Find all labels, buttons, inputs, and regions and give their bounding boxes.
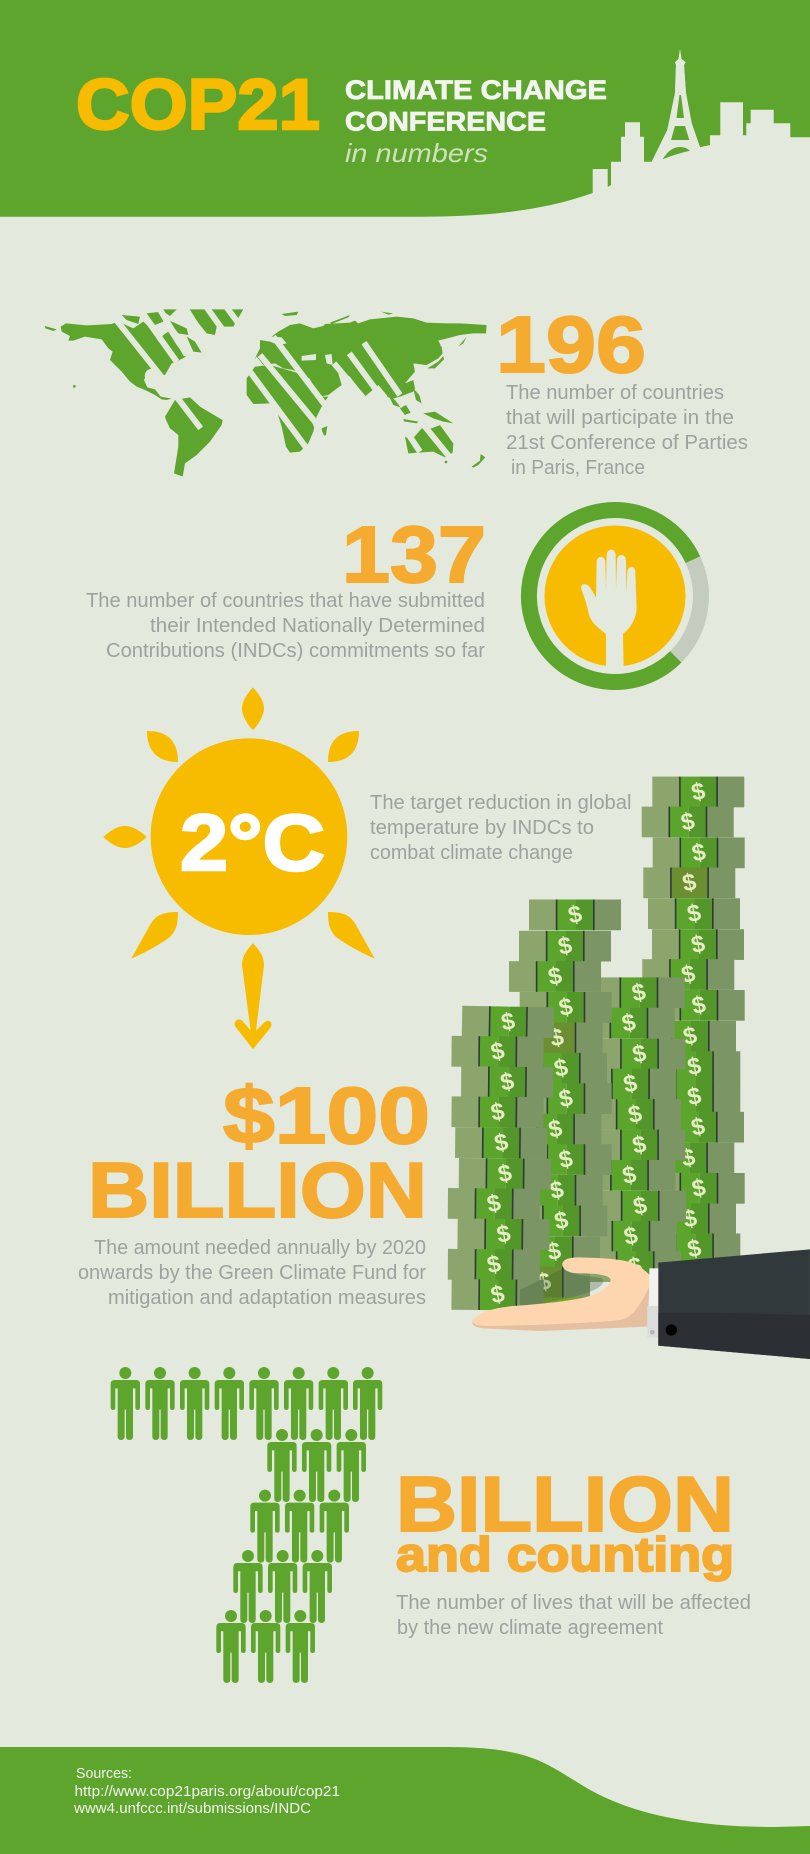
money stack: third column: $ <box>621 1222 641 1251</box>
title: COP21: COP21 <box>76 66 320 145</box>
money stack: right column: $ <box>678 807 698 837</box>
icon: hand and suit sleeve <box>472 1249 810 1359</box>
money stack: right column: $ <box>681 1022 700 1051</box>
stat: 196: 196 <box>496 300 646 389</box>
text: 196 description: that will participate in the <box>506 407 734 429</box>
money stack: right column: $ <box>680 868 699 898</box>
stat: $100 billion <box>88 1071 430 1234</box>
stat: $100 billion: $100 <box>223 1071 430 1160</box>
text: sources: www4.unfccc.int/submissions/INDC <box>73 1800 311 1817</box>
money stack: left column: $ <box>488 1098 508 1127</box>
text: temperature target description <box>370 792 632 864</box>
money stack: left column: $ <box>492 1128 511 1158</box>
money stack: third column: $ <box>626 1252 645 1281</box>
money stack: second column: $ <box>566 900 585 930</box>
money stack: second column: $ <box>547 1176 567 1205</box>
money stack: left column: $ <box>498 1068 517 1097</box>
money stack: third column: $ <box>630 1039 649 1069</box>
money stack: right column: $ <box>679 960 698 989</box>
icon: sun with 2 degrees C <box>103 687 375 959</box>
money stack: second column: $ <box>552 1054 571 1083</box>
subtitle: CLIMATE CHANGE <box>345 75 607 105</box>
world map with diagonal stripes <box>45 307 487 477</box>
money stack: right column <box>642 777 745 1264</box>
money stack: second column: $ <box>545 1237 564 1266</box>
text: sources: http://www.cop21paris.org/about/cop21 <box>74 1783 340 1800</box>
text: 196 description: 21st Conference of Parties <box>506 432 748 454</box>
text: lives affected description <box>396 1592 751 1639</box>
money stack: right column: $ <box>685 1082 704 1111</box>
money stack: left column: $ <box>485 1189 504 1218</box>
subtitle: CONFERENCE <box>345 106 546 136</box>
text: temperature target description: combat climate change <box>370 842 573 864</box>
money stack: third column: $ <box>626 1100 645 1129</box>
money stack: right column: $ <box>689 991 709 1020</box>
stat: billion and counting: BILLION <box>396 1460 734 1548</box>
money stack: second column: $ <box>546 1115 565 1144</box>
text: $100 billion description <box>78 1237 426 1309</box>
money stack: third column <box>583 977 686 1282</box>
money stack: second column: $ <box>556 1145 576 1174</box>
money stack: left column: $ <box>485 1250 504 1279</box>
money stack: second column: $ <box>535 1267 554 1297</box>
money stack: right column: $ <box>681 1204 700 1234</box>
money stack: left column: $ <box>488 1037 508 1066</box>
money stack: right column: $ <box>685 1052 704 1081</box>
text: $100 billion description: mitigation and adaptation measures <box>108 1287 426 1309</box>
money stack: second column: $ <box>547 1023 567 1053</box>
icon: Eiffel Tower <box>652 49 700 162</box>
money stack: second column <box>498 900 621 1306</box>
money stack: left column: $ <box>488 1280 508 1309</box>
money stack: right column: $ <box>685 1234 704 1264</box>
text: lives affected description: The number of lives that will be affected <box>396 1592 751 1614</box>
subtitle <box>345 75 607 168</box>
text: temperature target description: temperature by INDCs to <box>370 817 594 839</box>
header banner with Paris skyline <box>0 0 810 217</box>
money stack: second column: $ <box>556 1084 576 1113</box>
money stack: right column: $ <box>679 1143 698 1173</box>
money stack: left column: $ <box>496 1159 515 1188</box>
money stack: right column: $ <box>689 838 709 868</box>
money stack: left column: $ <box>494 1220 514 1249</box>
icon: sun with 2 degrees C: 2°C <box>180 798 325 887</box>
money stack: second column: $ <box>546 962 565 991</box>
text: lives affected description: by the new climate agreement <box>397 1617 663 1639</box>
text: sources <box>73 1765 340 1817</box>
stat: $100 billion: BILLION <box>88 1146 427 1234</box>
text: temperature target description: The target reduction in global <box>370 792 632 814</box>
money stack: third column: $ <box>620 1161 639 1190</box>
text: 137 description <box>86 590 485 662</box>
money stack: right column: $ <box>689 777 708 807</box>
money stack: right column: $ <box>689 1113 708 1142</box>
money stack: right column: $ <box>689 930 708 959</box>
stat: billion and counting <box>396 1460 734 1582</box>
icon: raised hand in progress ring <box>529 510 701 682</box>
text: 137 description: Contributions (INDCs) commitments so far <box>106 640 485 662</box>
text: 196 description: in Paris, France <box>511 457 645 479</box>
money stack: third column: $ <box>619 1009 639 1038</box>
money stack: right column: $ <box>685 899 704 928</box>
money stack: third column: $ <box>629 978 649 1007</box>
pictogram: people forming number 7 <box>111 1367 382 1683</box>
money stack: left column: $ <box>499 1007 518 1037</box>
arrow: sun to $100 billion <box>235 943 272 1049</box>
footer band <box>0 1747 810 1854</box>
text: 196 description <box>506 382 748 479</box>
text: sources: Sources: <box>76 1765 132 1782</box>
money stack: second column: $ <box>556 932 575 961</box>
text: 196 description: The number of countries <box>506 382 724 404</box>
text: 137 description: The number of countries that have submitted <box>86 590 485 612</box>
subtitle: in numbers <box>345 138 488 168</box>
money stack: third column: $ <box>630 1130 649 1160</box>
money stack: third column: $ <box>631 1192 650 1221</box>
illustration: stacks of money on hand <box>448 777 810 1359</box>
money stack: right column: $ <box>689 1174 709 1203</box>
text: $100 billion description: The amount needed annually by 2020 <box>94 1237 426 1259</box>
stat: 137: 137 <box>342 510 486 599</box>
money stack: left column <box>448 1006 554 1311</box>
stat: billion and counting: and counting <box>396 1529 734 1582</box>
money stack: second column: $ <box>556 993 576 1022</box>
money stack: second column: $ <box>552 1206 571 1236</box>
text: 137 description: their Intended Nationally Determined <box>150 615 485 637</box>
money stack: third column: $ <box>621 1069 640 1099</box>
text: $100 billion description: onwards by the Green Climate Fund for <box>78 1262 426 1284</box>
